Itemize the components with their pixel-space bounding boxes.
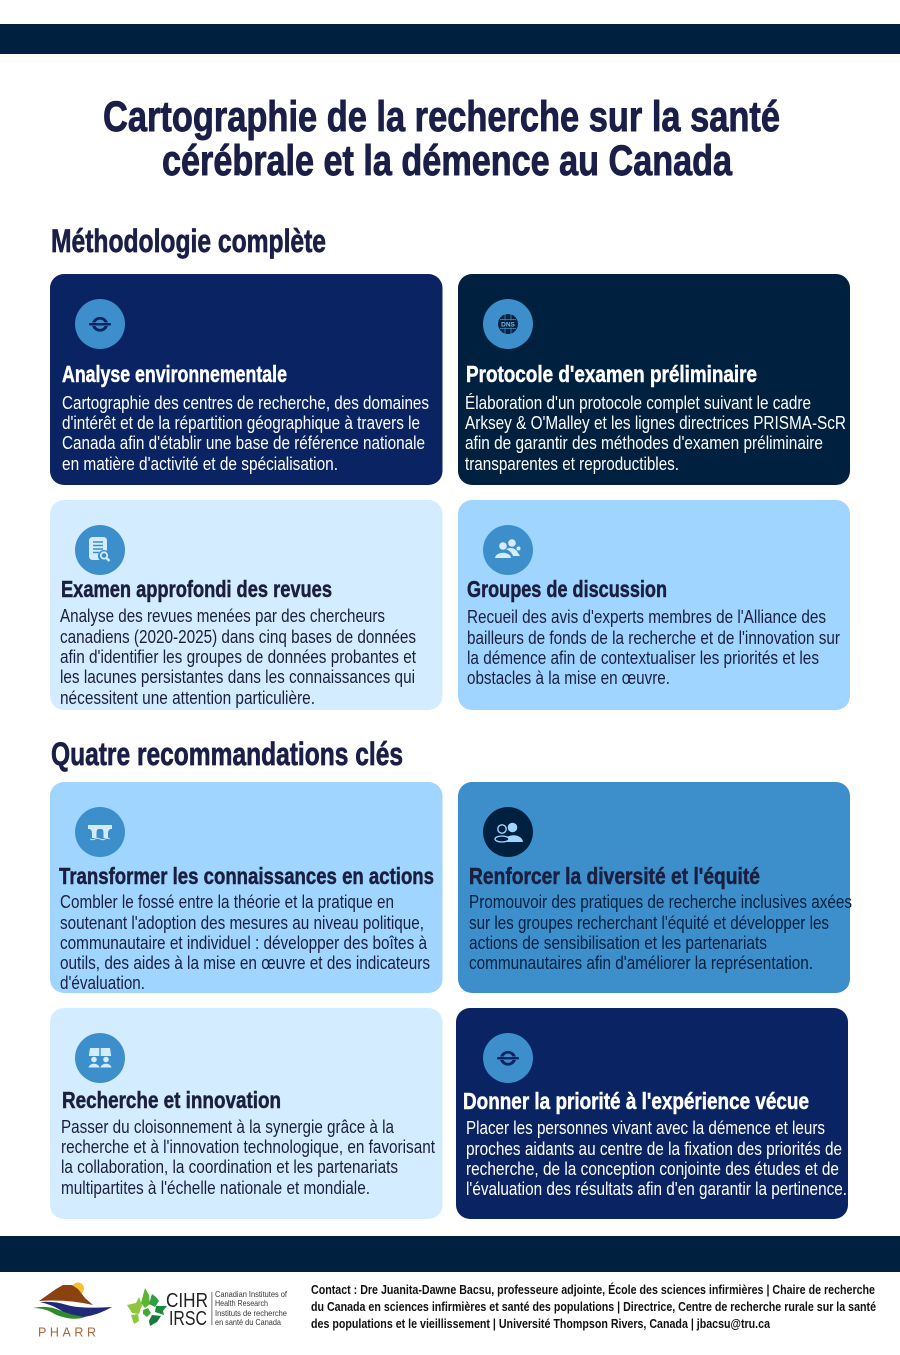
panel: groupes de discussion [458, 500, 850, 710]
card text: transparentes et reproductibles. [465, 454, 679, 474]
icon: people [483, 525, 533, 575]
icon: DNS globe: DNS [501, 322, 516, 329]
card heading: Recherche et innovation [62, 1087, 281, 1113]
card text [469, 892, 852, 973]
logo: CIHR IRSC: CIHR [166, 1290, 208, 1312]
card text: Passer du cloisonnement à la synergie grâce à la [61, 1117, 395, 1137]
contact text [311, 1282, 876, 1331]
logo: CIHR IRSC: en santé du Canada [215, 1317, 281, 1327]
bottom banner [0, 1236, 900, 1272]
card text: Analyse des revues menées par des chercheurs [60, 606, 385, 626]
card text: multipartites à l'échelle nationale et mondiale. [61, 1178, 370, 1198]
icon: scanning eye [483, 1033, 533, 1083]
card text: sur les groupes recherchant l'équité et développer les [469, 913, 829, 933]
icon: DNS globe [483, 299, 533, 349]
card text: d'intérêt et de la répartition géographique à travers le [62, 413, 420, 433]
card text [60, 606, 416, 708]
icon: bridge [75, 807, 125, 857]
card text: afin de garantir des méthodes d'examen préliminaire [465, 433, 823, 453]
card text [62, 393, 429, 474]
card text [465, 393, 846, 474]
icon: two people outline [483, 807, 533, 857]
panel: transformer [50, 782, 442, 993]
card text [467, 607, 840, 688]
card text: d'évaluation. [60, 973, 145, 993]
icon: document with magnifier [75, 525, 125, 575]
card text: en matière d'activité et de spécialisation. [62, 454, 338, 474]
card text: soutenant l'adoption des mesures au niveau politique, [60, 913, 424, 933]
card text: outils, des aides à la mise en œuvre et des indicateurs [60, 953, 430, 973]
contact text: des populations et le vieillissement | Université Thompson Rivers, Canada | jbacsu@tru.ca [311, 1317, 771, 1331]
title [103, 93, 780, 185]
card text: recherche et à l'innovation technologique, en favorisant [61, 1137, 435, 1157]
card text [61, 1117, 435, 1198]
panel: expérience vécue [456, 1008, 848, 1219]
panel: analyse environnementale [50, 274, 442, 485]
card text: bailleurs de fonds de la recherche et de l'innovation sur [467, 628, 840, 648]
card text [60, 892, 430, 993]
logo: PHARR [33, 1282, 112, 1340]
card text: actions de sensibilisation et les partenariats [469, 933, 767, 953]
heading: méthodologie: Méthodologie complète [51, 223, 326, 259]
card text: canadiens (2020-2025) dans cinq bases de données [60, 627, 416, 647]
logo: CIHR IRSC: Instituts de recherche [215, 1308, 287, 1318]
card text: la démence afin de contextualiser les priorités et les [467, 648, 819, 668]
panel: diversité et équité [458, 782, 852, 993]
card text: Recueil des avis d'experts membres de l'Alliance des [467, 607, 826, 627]
card text: nécessitent une attention particulière. [60, 688, 315, 708]
card text: la collaboration, la coordination et les partenariats [61, 1157, 398, 1177]
logo: CIHR IRSC: Health Research [215, 1298, 268, 1308]
card heading: Transformer les connaissances en actions [59, 863, 434, 889]
card text: les lacunes persistantes dans les connaissances qui [60, 667, 415, 687]
title: cérébrale et la démence au Canada [162, 137, 733, 185]
card text: Cartographie des centres de recherche, des domaines [62, 393, 429, 413]
card heading: Examen approfondi des revues [61, 576, 332, 602]
card text: Élaboration d'un protocole complet suivant le cadre [465, 393, 811, 413]
top banner [0, 24, 900, 54]
card heading: Donner la priorité à l'expérience vécue [463, 1088, 809, 1114]
logo: CIHR IRSC: Canadian Institutes of [215, 1289, 288, 1299]
card text: Combler le fossé entre la théorie et la pratique en [60, 892, 394, 912]
heading: recommandations: Quatre recommandations clés [51, 736, 403, 772]
icon: scanning eye [75, 299, 125, 349]
card text: Canada afin d'établir une base de référence nationale [62, 433, 425, 453]
logo: CIHR IRSC: IRSC [169, 1308, 207, 1330]
card text: afin d'identifier les groupes de données probantes et [60, 647, 416, 667]
panel: examen approfondi [50, 500, 442, 710]
card text: recherche, de la conception conjointe des études et de [466, 1159, 839, 1179]
card text: proches aidants au centre de la fixation des priorités de [466, 1139, 842, 1159]
logo: PHARR: PHARR [38, 1326, 96, 1340]
card text: Placer les personnes vivant avec la démence et leurs [466, 1118, 825, 1138]
panel: recherche et innovation [50, 1008, 442, 1219]
card heading: Protocole d'examen préliminaire [466, 361, 757, 387]
card text: obstacles à la mise en œuvre. [467, 668, 670, 688]
card text: communautaire et individuel : développer des boîtes à [60, 933, 428, 953]
icon: book and people [75, 1033, 125, 1083]
card text: Arksey & O'Malley et les lignes directrices PRISMA-ScR [465, 413, 846, 433]
card heading: Analyse environnementale [62, 361, 287, 387]
card heading: Renforcer la diversité et l'équité [469, 863, 760, 889]
card text [466, 1118, 847, 1199]
panel: protocole d'examen [458, 274, 850, 485]
logo: CIHR IRSC [127, 1288, 288, 1330]
card heading: Groupes de discussion [467, 576, 667, 602]
card text: communautaires afin d'améliorer la représentation. [469, 953, 813, 973]
